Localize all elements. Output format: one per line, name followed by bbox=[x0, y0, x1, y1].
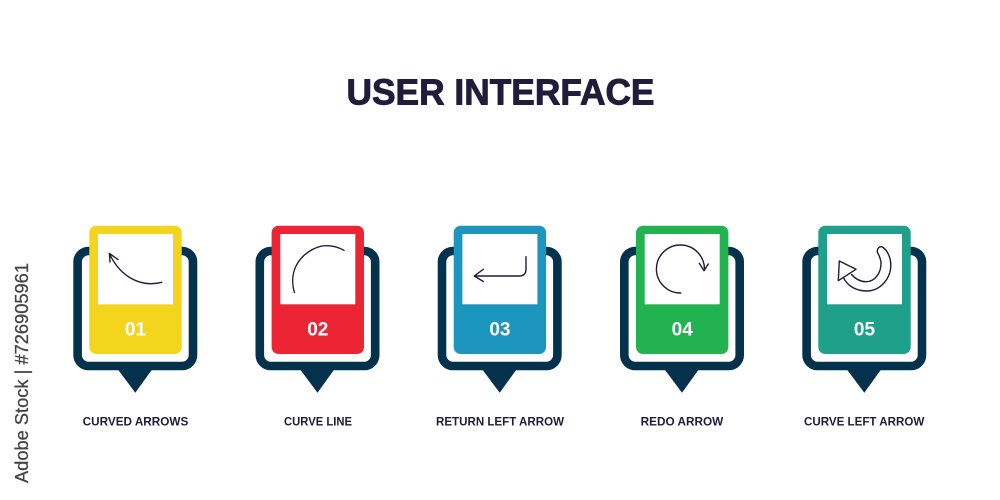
icon frame bbox=[98, 234, 173, 304]
icon frame bbox=[645, 234, 720, 304]
colored card bbox=[818, 226, 911, 354]
colored card bbox=[89, 226, 182, 354]
pin outline bbox=[624, 251, 740, 393]
icon frame bbox=[827, 234, 902, 304]
side credit text: Adobe Stock | #726905961 bbox=[12, 263, 32, 483]
icon: curve left arrow bbox=[838, 247, 891, 291]
pin outline bbox=[78, 251, 193, 393]
panel: curve left arrow bbox=[804, 226, 924, 429]
number: 01 bbox=[125, 320, 146, 341]
colored card bbox=[454, 226, 546, 354]
number: 04 bbox=[672, 320, 693, 341]
panel: curved arrows bbox=[78, 226, 193, 429]
icon frame bbox=[462, 234, 537, 304]
icon: return left arrow bbox=[474, 257, 526, 282]
label: CURVE LINE bbox=[284, 417, 352, 429]
colored card bbox=[636, 226, 728, 354]
number: 05 bbox=[854, 320, 875, 341]
pin outline bbox=[807, 251, 922, 393]
panel: redo arrow bbox=[624, 226, 740, 429]
icon: curved arrow bbox=[109, 253, 162, 284]
icon frame bbox=[280, 234, 355, 304]
pin outline bbox=[260, 251, 375, 393]
panel: curve line bbox=[260, 226, 375, 429]
number: 03 bbox=[489, 320, 510, 341]
label: CURVE LEFT ARROW bbox=[804, 417, 924, 429]
label: CURVED ARROWS bbox=[83, 417, 189, 429]
title: USER INTERFACE bbox=[346, 72, 654, 112]
icon: curve line bbox=[293, 246, 344, 292]
label: REDO ARROW bbox=[641, 417, 723, 429]
label: RETURN LEFT ARROW bbox=[436, 417, 564, 429]
colored card bbox=[272, 226, 364, 354]
icon: redo arrow bbox=[656, 245, 708, 293]
number: 02 bbox=[307, 320, 328, 341]
pin outline bbox=[442, 251, 557, 393]
panel: return left arrow bbox=[436, 226, 564, 429]
